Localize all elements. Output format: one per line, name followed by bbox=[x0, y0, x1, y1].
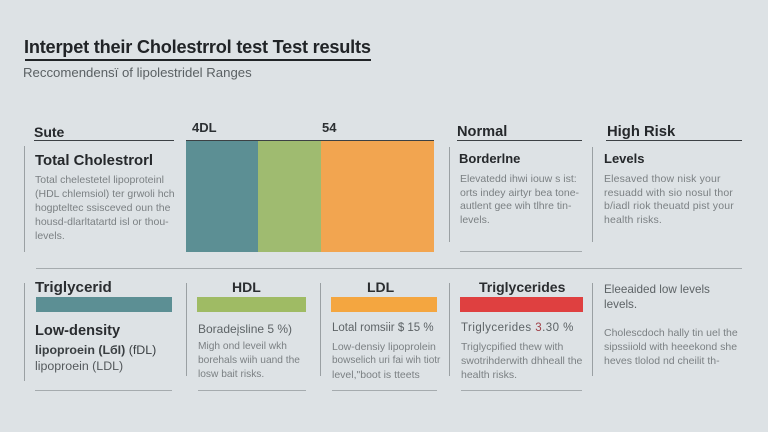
range value: Triglycerides 3.30 % bbox=[461, 322, 574, 334]
description: housd-dlarltatartd isl or thou- bbox=[35, 216, 169, 228]
description: b/iadl riok theuatd pist your bbox=[604, 200, 734, 212]
description: Migh ond leveil wkh bbox=[198, 341, 287, 352]
segment: green bbox=[258, 141, 321, 252]
subtitle: Reccomendensï of lipolestridel Ranges bbox=[23, 65, 252, 80]
title: Interpet their Cholestrrol test Test results bbox=[24, 37, 371, 57]
description: orts indey airtyr bea tone- bbox=[460, 187, 579, 199]
bar: red bbox=[460, 297, 583, 312]
column heading: Sute: Sute bbox=[34, 124, 64, 140]
description bbox=[198, 341, 300, 380]
heading: borderline: Borderlne bbox=[459, 151, 520, 166]
description: borehals wiih uand the bbox=[198, 355, 300, 366]
note heading: levels. bbox=[604, 298, 637, 311]
description: heves tlolod nd cheilit th- bbox=[604, 355, 720, 367]
heading: low-density: Low-density bbox=[35, 323, 120, 339]
description: health risks. bbox=[461, 369, 517, 381]
range value: Boradeįsline 5 %) bbox=[198, 322, 292, 336]
description: levels. bbox=[460, 214, 490, 226]
description: Elesaved thow nisk your bbox=[604, 173, 721, 185]
description bbox=[460, 173, 579, 226]
chart label: 54: 54 bbox=[322, 120, 336, 135]
panel: high risk / levels bbox=[592, 124, 742, 242]
note heading bbox=[604, 283, 710, 311]
description: level,"boot is tteets bbox=[332, 369, 420, 381]
description: lipoproein (LбI) (fDL) bbox=[35, 343, 156, 357]
heading: triglycerides: Triglycerides bbox=[479, 279, 565, 295]
heading: total cholesterol: Total Cholestrorl bbox=[35, 153, 153, 169]
panel: triglycerid / low-density bbox=[24, 279, 172, 391]
range value: Lotal romsiir $ 15 % bbox=[332, 322, 434, 334]
header bbox=[23, 37, 371, 80]
segment: teal bbox=[186, 141, 258, 252]
description bbox=[604, 173, 734, 226]
description bbox=[35, 174, 175, 242]
chart label: 4DL: 4DL bbox=[192, 120, 217, 135]
panel: HDL bbox=[186, 279, 306, 391]
panel: elevated levels note bbox=[592, 283, 738, 376]
heading: LDL: LDL bbox=[367, 279, 394, 295]
description bbox=[604, 327, 738, 367]
panel: LDL bbox=[320, 279, 440, 391]
bar: green bbox=[197, 297, 306, 312]
description: sipssiiold with heeekond she bbox=[604, 341, 737, 353]
description: losw bait risks. bbox=[198, 369, 264, 380]
description: (HDL chlemsiol) ter grwoli hch bbox=[35, 188, 175, 200]
bar: orange bbox=[331, 297, 437, 312]
description: Triglycpified thew with bbox=[461, 341, 563, 353]
description bbox=[461, 341, 582, 381]
panel: triglycerides bbox=[449, 279, 583, 391]
column heading: normal: Normal bbox=[457, 124, 507, 140]
panel: normal / borderline bbox=[449, 124, 582, 252]
description: bowselich uri fai wih tiotr bbox=[332, 355, 440, 366]
description bbox=[332, 341, 440, 381]
column heading: high risk: High Risk bbox=[607, 124, 675, 140]
description: hogpteltec ssisceved oun the bbox=[35, 202, 170, 214]
description: levels. bbox=[35, 230, 65, 242]
stacked range chart bbox=[186, 120, 434, 252]
description: autlent gee wih tlhre tin- bbox=[460, 200, 571, 212]
description: Elevatedd ihwi iouw s ist: bbox=[460, 173, 577, 185]
title rule bbox=[25, 59, 371, 61]
note heading: Eleeaided low levels bbox=[604, 283, 710, 296]
heading: levels: Levels bbox=[604, 151, 644, 166]
description: swotrihderwith dhheall the bbox=[461, 355, 582, 367]
description: Low-densiy lipoprolein bbox=[332, 341, 436, 353]
description: health risks. bbox=[604, 214, 662, 226]
description: resuadd with sio nosul thor bbox=[604, 187, 733, 199]
description: Cholescdoch hally tin uel the bbox=[604, 327, 738, 339]
description: Total chelestetel lipoproteinl bbox=[35, 174, 164, 186]
bar: teal bbox=[36, 297, 172, 312]
segment: orange bbox=[321, 141, 434, 252]
panel: total cholesterol bbox=[24, 124, 175, 252]
panel: triglycerid / low-density: lipoproein (LDL) bbox=[35, 359, 123, 373]
heading: triglycerid: Triglycerid bbox=[35, 279, 112, 296]
heading: HDL: HDL bbox=[232, 279, 261, 295]
